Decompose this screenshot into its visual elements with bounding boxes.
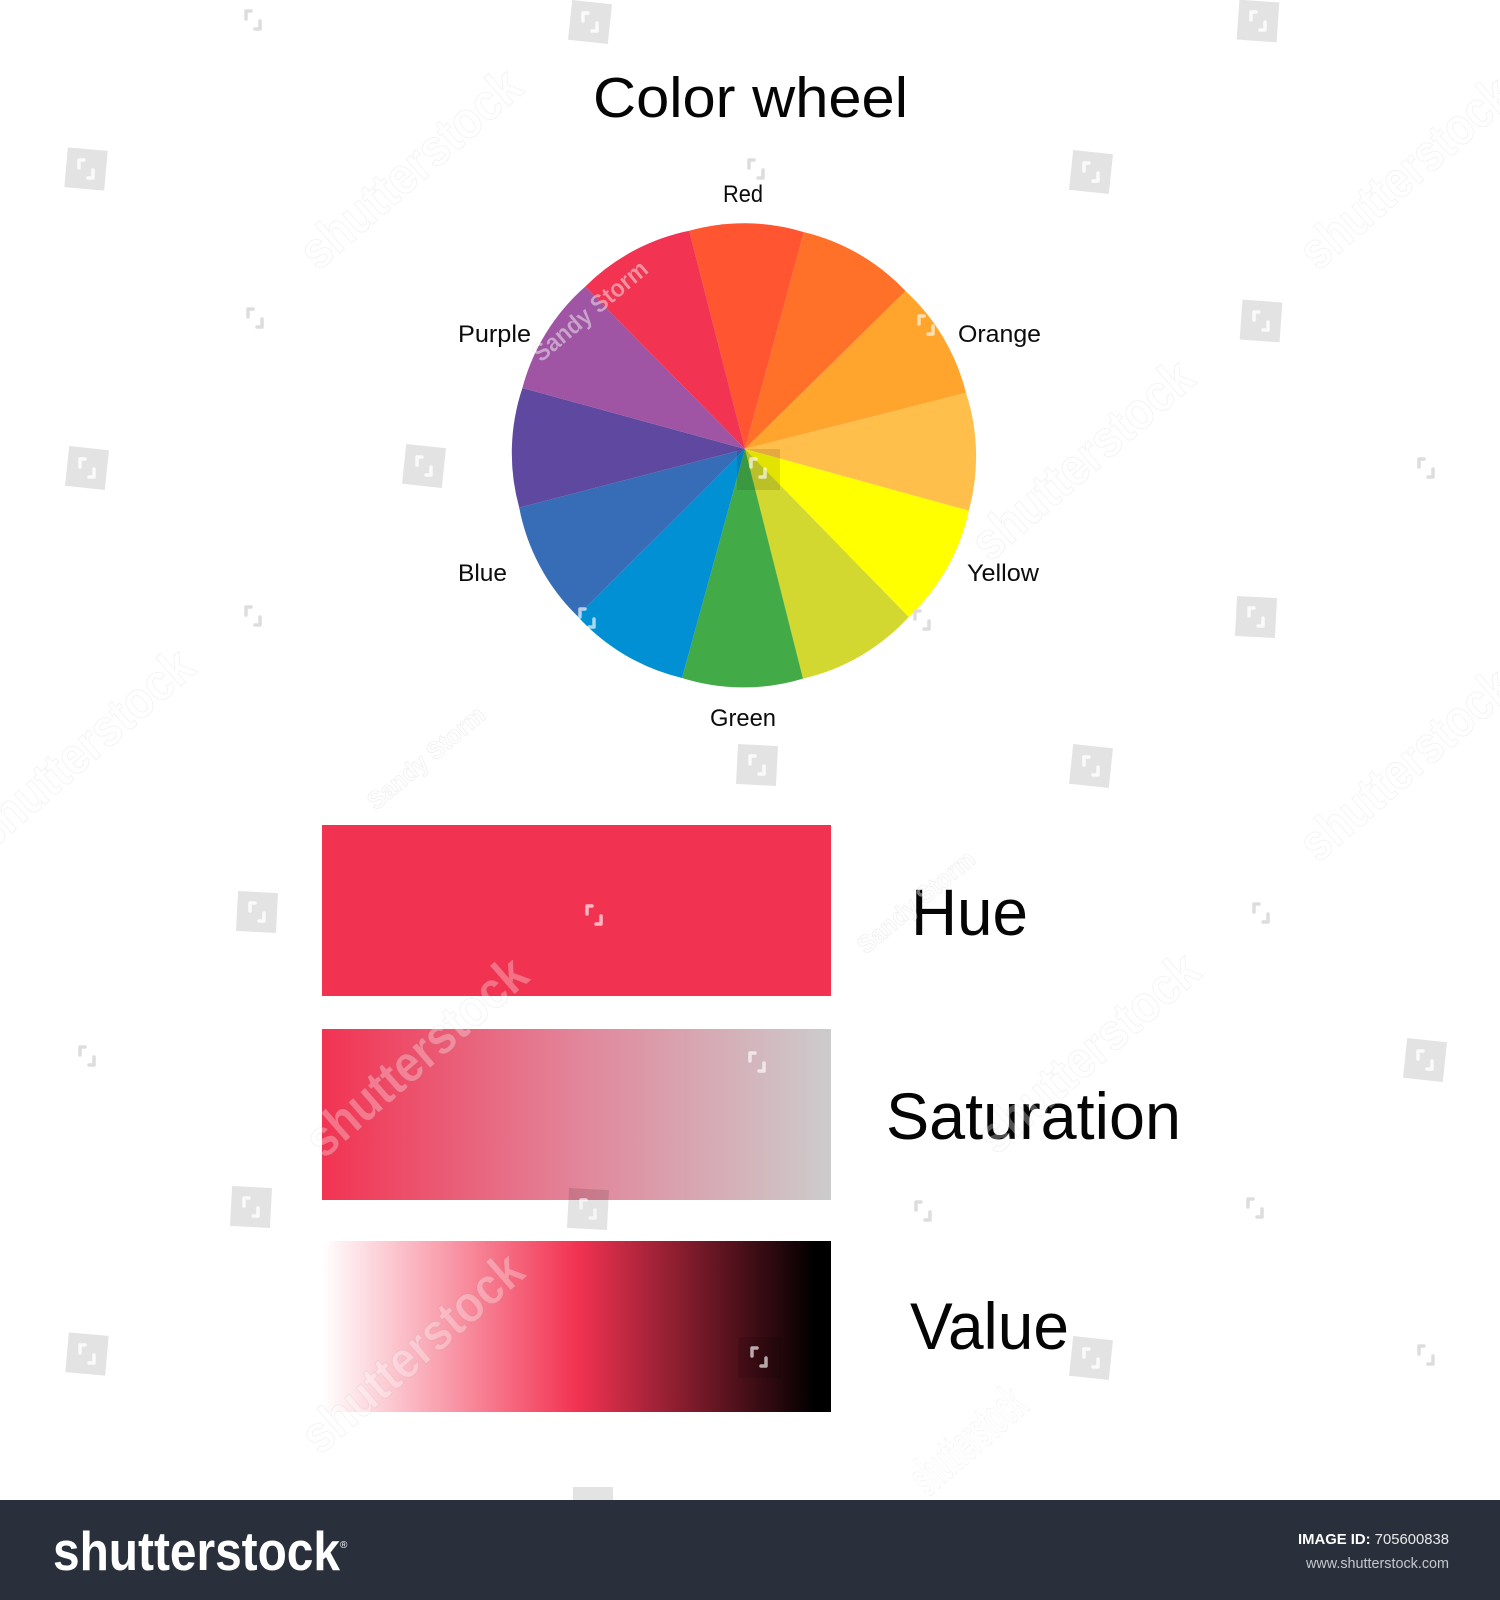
hue label: Hue bbox=[911, 875, 1028, 949]
watermark overlay: Sandy Storm bbox=[852, 845, 981, 960]
value bar bbox=[322, 1241, 831, 1412]
saturation bar bbox=[322, 1029, 831, 1200]
image id: IMAGE ID: 705600838 bbox=[1298, 1531, 1449, 1548]
wheel labels: Orange bbox=[958, 321, 1041, 348]
wheel labels: Red bbox=[723, 181, 763, 208]
title: Color wheel bbox=[593, 66, 908, 130]
saturation label: Saturation bbox=[886, 1079, 1181, 1153]
footer logo: shutterstock bbox=[53, 1520, 340, 1582]
wheel labels: Blue bbox=[458, 560, 507, 587]
footer bar bbox=[0, 1500, 1500, 1600]
watermark overlay: shutterstock bbox=[898, 1375, 1038, 1507]
watermark overlay: Sandy Storm bbox=[362, 701, 491, 816]
wheel labels: Green bbox=[710, 705, 776, 732]
value label: Value bbox=[910, 1289, 1069, 1363]
wheel labels bbox=[458, 181, 1041, 732]
watermark overlay: shutterstock bbox=[966, 941, 1211, 1165]
hue bar bbox=[322, 825, 831, 996]
watermark overlay: Sandy Storm bbox=[527, 255, 654, 368]
color wheel bbox=[512, 223, 976, 687]
watermark overlay: shutterstock bbox=[960, 348, 1205, 572]
wheel labels: Yellow bbox=[967, 560, 1040, 587]
watermark overlay: shutterstock bbox=[288, 57, 533, 281]
watermark overlay: shutterstock bbox=[290, 1241, 535, 1465]
watermark overlay: shutterstock bbox=[294, 945, 539, 1169]
website: www.shutterstock.com bbox=[1305, 1555, 1449, 1572]
wheel labels: Purple bbox=[458, 321, 531, 348]
registered mark: ® bbox=[340, 1540, 348, 1551]
